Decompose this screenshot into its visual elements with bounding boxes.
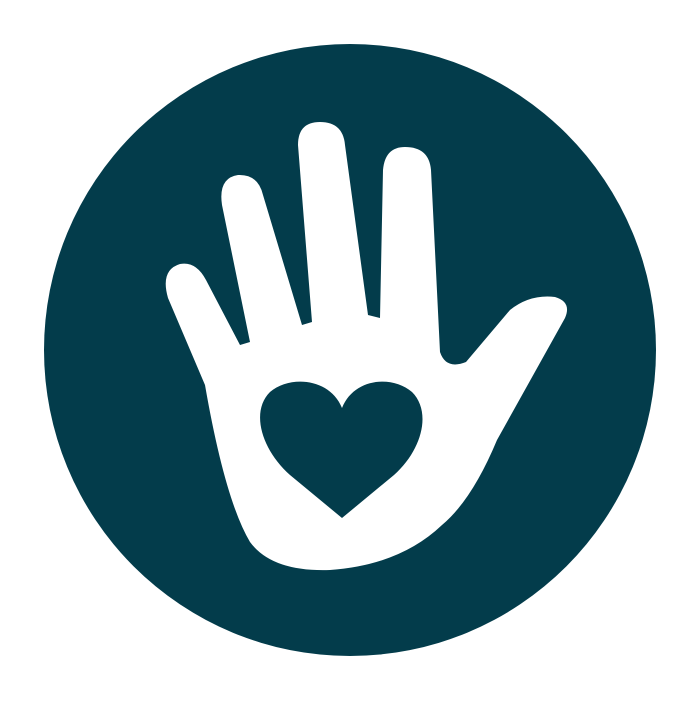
icon: heart	[260, 382, 422, 518]
circle background	[44, 44, 656, 656]
icon: hand	[166, 122, 567, 570]
